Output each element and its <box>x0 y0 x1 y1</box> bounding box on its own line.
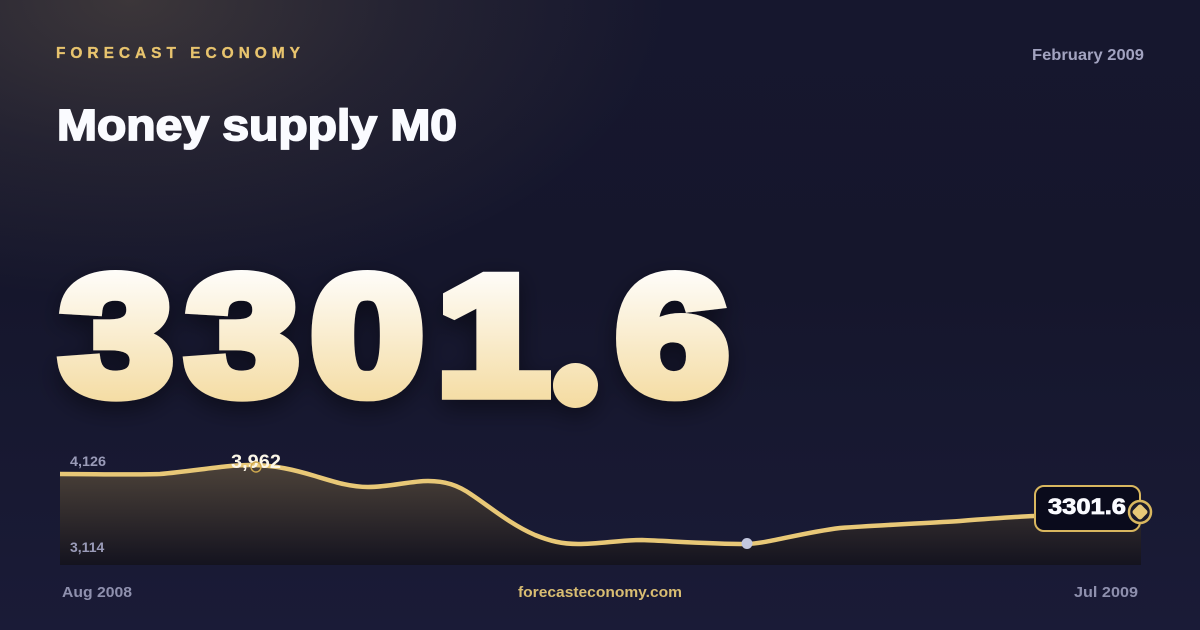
peak label: 3,962 <box>231 452 281 473</box>
big value: 3301 <box>60 243 549 430</box>
big value: 6 <box>616 243 729 430</box>
chart line <box>60 465 1035 544</box>
chart area fill <box>60 465 1141 565</box>
date: February 2009 <box>1032 47 1144 64</box>
brand label: FORECAST ECONOMY <box>56 45 301 62</box>
title: Money supply M0 <box>57 101 457 150</box>
axis max label: 4,126 <box>70 453 106 469</box>
start date: Aug 2008 <box>62 584 132 601</box>
current value callout: 3301.6 <box>1048 494 1126 519</box>
website: forecasteconomy.com <box>518 584 682 601</box>
decimal point dot <box>553 363 598 408</box>
end date: Jul 2009 <box>1074 584 1138 601</box>
area chart <box>60 452 1151 565</box>
axis min label: 3,114 <box>70 539 104 555</box>
peak marker <box>251 462 261 472</box>
low marker <box>742 538 752 549</box>
current marker <box>1129 501 1151 523</box>
current value callout <box>1035 486 1140 531</box>
big value: . <box>547 243 604 430</box>
